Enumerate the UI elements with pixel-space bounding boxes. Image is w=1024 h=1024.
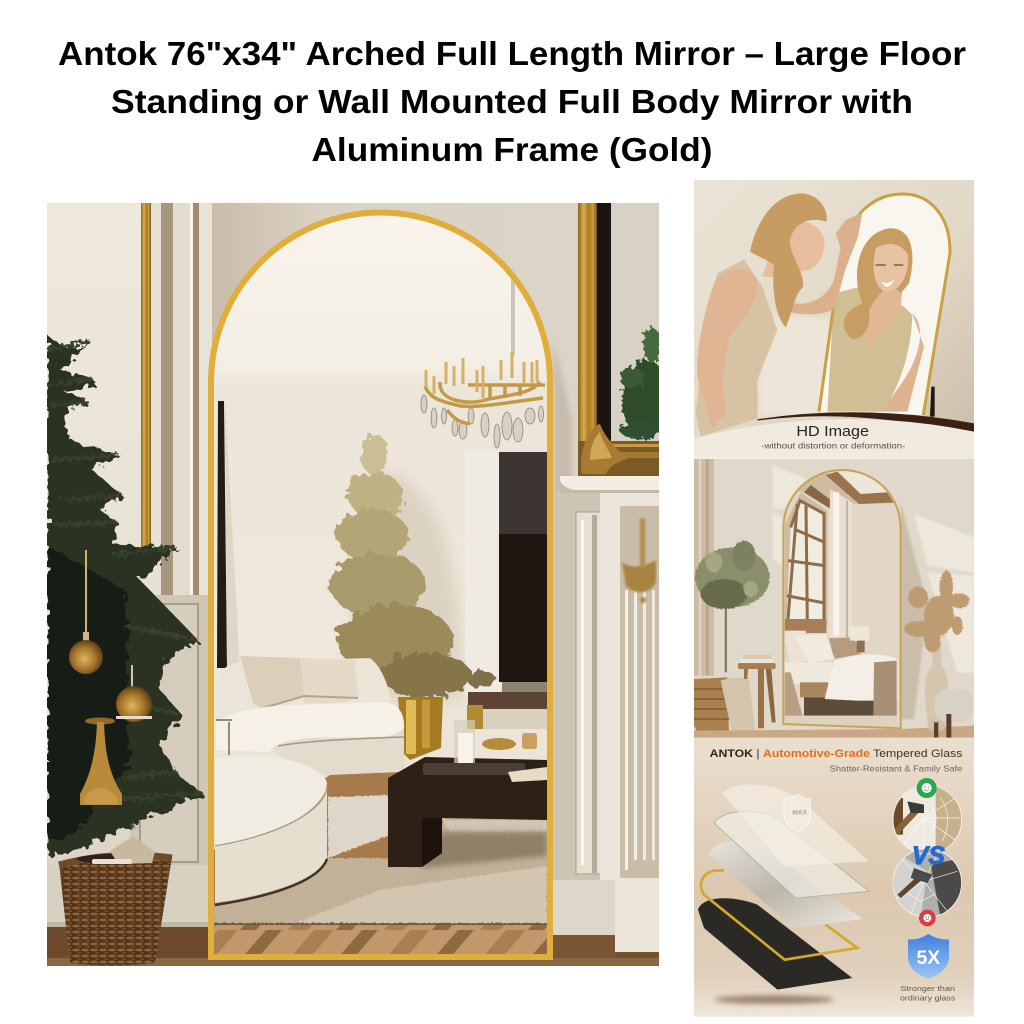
cream caption band [694, 419, 974, 460]
reflected wood floor [214, 772, 547, 930]
beige background [694, 738, 974, 1018]
reflected throw pillows [240, 656, 358, 709]
woven basket [59, 836, 172, 966]
silver film layer [709, 841, 862, 928]
title: Standing or Wall Mounted Full Body Mirror with [111, 83, 913, 120]
caption: stronger than ordinary glass: ordinary glass [900, 994, 956, 1003]
black backing layer [698, 898, 852, 990]
gold frame layer [701, 870, 857, 960]
frosted top layer [722, 785, 869, 866]
reflected window [782, 492, 827, 626]
caption: without distortion or deformation: -without distortion or deformation- [761, 442, 906, 451]
reflected chandelier [421, 275, 545, 448]
side photo: woman with mirror, HD Image [694, 180, 974, 460]
mirror reflection [774, 469, 901, 732]
mirror shadow on wall [901, 502, 927, 719]
woman's shoulder and arm [697, 269, 757, 428]
wall glow behind woman [759, 317, 831, 417]
hanging gold ornaments [69, 550, 152, 805]
reflected round ottoman [215, 756, 327, 905]
subheading: Shatter-Resistant & Family Safe [830, 764, 963, 773]
back wall [212, 203, 578, 490]
mirror reflection [214, 212, 547, 957]
arched standing mirror glass [819, 194, 950, 415]
baseboard and plinth [553, 880, 659, 952]
reflected bed with pillows [774, 619, 897, 730]
gold mirror frame [819, 194, 950, 415]
christmas tree [47, 335, 204, 855]
wooden stool with books [738, 655, 776, 728]
woman's blonde hair [750, 193, 827, 327]
MAX shield [784, 794, 811, 831]
mirror shadow on wall [552, 350, 574, 490]
curtain [694, 459, 714, 676]
mirror stand leg [930, 387, 935, 417]
circle outlines [893, 785, 962, 917]
bedroom wall [694, 459, 974, 739]
wall molding strips [141, 203, 199, 595]
reflected ceiling and beams [782, 470, 897, 511]
headline: ANTOK | Automotive-Grade Tempered Glass [710, 748, 963, 760]
main photo: gold arched mirror in a living room [47, 203, 670, 966]
gold mirror frame [211, 213, 550, 957]
wall background [694, 180, 974, 460]
side photo: tempered glass feature graphic [694, 738, 974, 1018]
caption: stronger than ordinary glass: Stronger than [900, 984, 955, 993]
caption: HD Image: HD Image [796, 424, 869, 440]
potted plant in wall mirror [618, 325, 659, 440]
VS mark: VS [912, 843, 945, 870]
wood floor [47, 927, 659, 966]
blue 5X shield [908, 934, 949, 979]
woman's arm to mirror [789, 213, 862, 314]
reflected parquet floor [214, 925, 547, 955]
side photo: bedroom with arched floor mirror [694, 459, 974, 739]
red sad badge [919, 910, 936, 926]
woman's dress [696, 259, 777, 437]
title: Antok 76"x34" Arched Full Length Mirror – Large Floor [58, 35, 966, 72]
clear glass layer [714, 811, 869, 898]
reflected curved sofa [216, 702, 404, 780]
thin gold arched frame [783, 470, 901, 728]
olive tree [695, 541, 770, 672]
upholstered ottoman [934, 689, 973, 738]
reflected gold leaf tree [330, 435, 496, 697]
reflected woman [827, 228, 924, 412]
ceramic vase [925, 646, 948, 730]
MAX shield: MAX [792, 810, 808, 817]
pampas grass [904, 571, 970, 652]
caption: stronger than ordinary glass [900, 984, 956, 1003]
reflected brass planter [398, 697, 443, 760]
reflected sofa back [225, 658, 392, 702]
blue 5X shield: 5X [917, 948, 940, 969]
lower wall panel behind the tree [47, 595, 212, 928]
wooden floor [694, 726, 974, 739]
dark curved band [757, 412, 974, 437]
reflected coffee table [388, 757, 547, 867]
ordinary glass hammer test circle [893, 849, 962, 918]
title [58, 35, 966, 168]
reflected white column and doorway [465, 438, 547, 729]
woven basket and blanket [694, 677, 756, 734]
reflected candle and decor on the table [454, 705, 547, 782]
gilded wall mirror [578, 203, 659, 477]
ground shadow [714, 995, 834, 1004]
reflected wall [214, 216, 547, 850]
reflected side table [216, 720, 232, 755]
left wall [47, 203, 151, 865]
tempered glass hammer test circle [893, 785, 962, 854]
sunlight patches on wall [772, 466, 974, 672]
reflected dark mirror edge [217, 401, 227, 668]
woman's neck and face [762, 222, 825, 278]
reflected curtain [828, 489, 852, 637]
reflected rug [214, 795, 547, 926]
vase over floor [927, 719, 946, 731]
title: Aluminum Frame (Gold) [312, 131, 712, 168]
fireplace mantel and pilaster [553, 476, 659, 885]
green smile badge [917, 778, 937, 798]
wall sconce [622, 518, 656, 603]
